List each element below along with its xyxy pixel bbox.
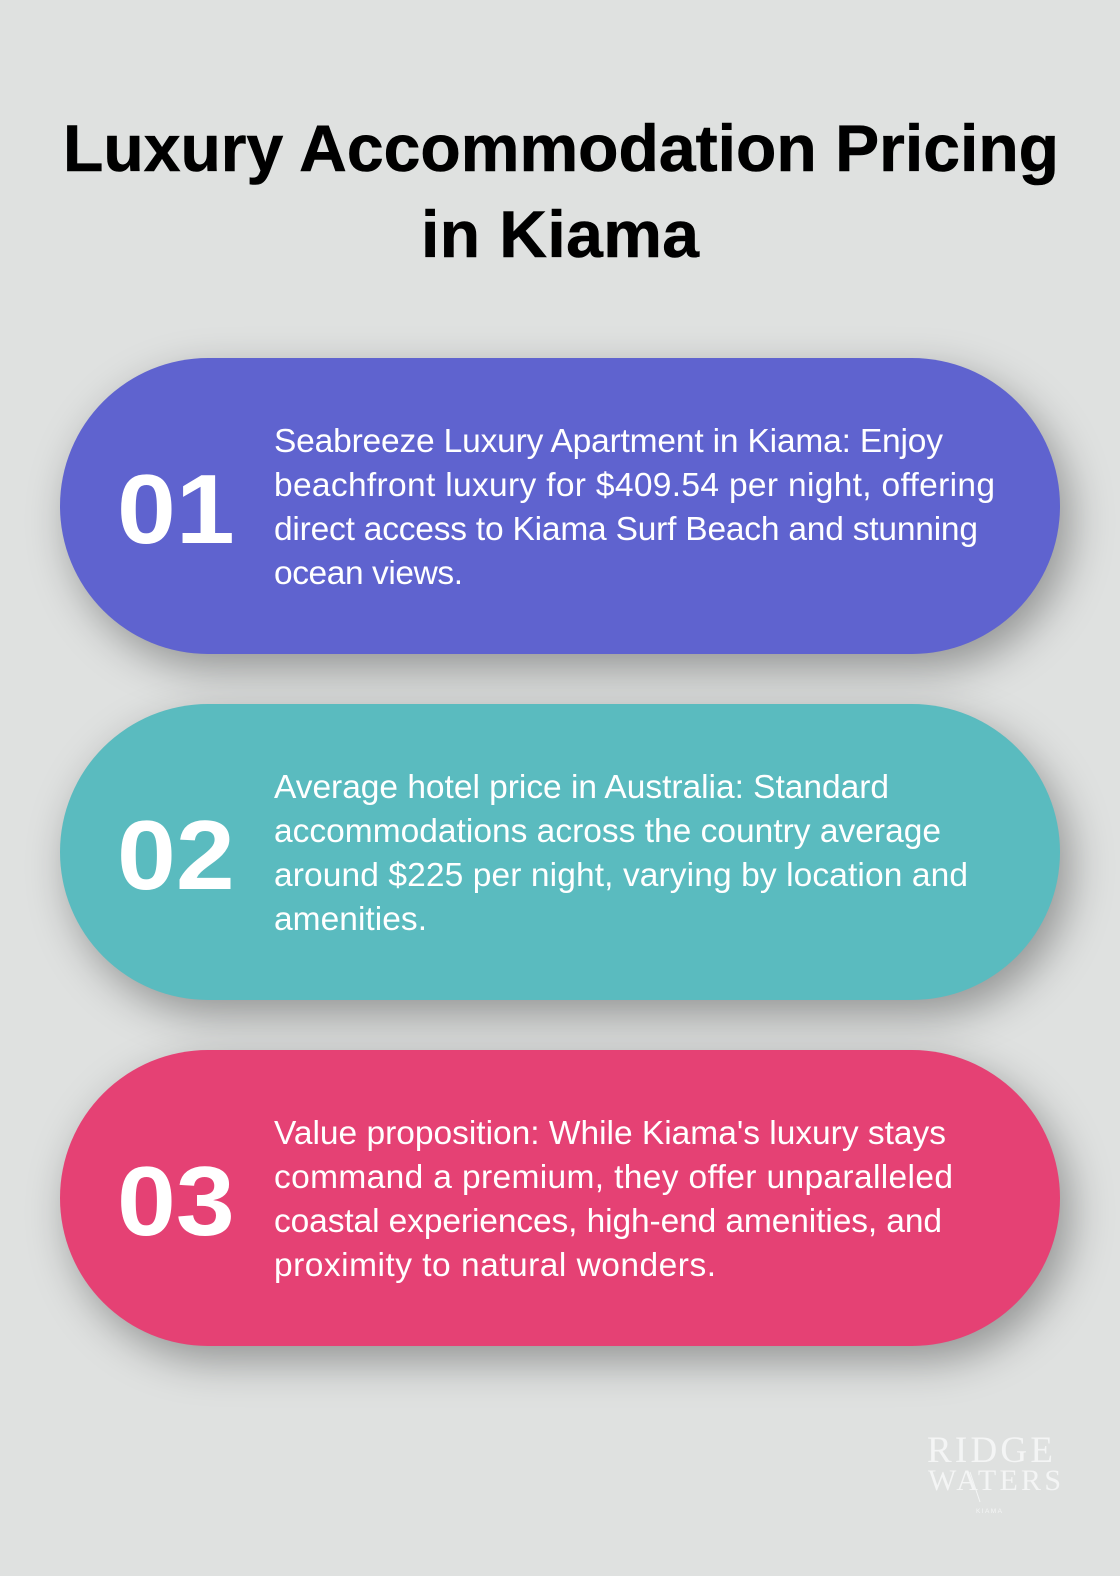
text block: value proposition description: coastal experiences, high-end amenities, and <box>274 1203 942 1240</box>
logo: Ridge Waters Kiama: RIDGE <box>927 1430 1053 1471</box>
step number 02: 02 <box>117 801 235 910</box>
text block: average hotel price description: Average hotel price in Australia: Standard <box>274 769 889 806</box>
panel: Seabreeze luxury apartment <box>60 358 1060 654</box>
panel: average hotel price <box>60 704 1060 1000</box>
text block: value proposition description <box>274 1115 953 1284</box>
logo: Ridge Waters Kiama: WATERS <box>928 1464 1061 1497</box>
step number 03: 03 <box>117 1147 235 1256</box>
text block: average hotel price description: around $225 per night, varying by location and <box>274 857 968 894</box>
panel: value proposition <box>60 1050 1060 1346</box>
text block: average hotel price description: accommodations across the country average <box>274 813 941 850</box>
text block: Seabreeze description: direct access to Kiama Surf Beach and stunning <box>274 511 978 548</box>
text block: Seabreeze description: Seabreeze Luxury Apartment in Kiama: Enjoy <box>274 423 943 460</box>
title: Luxury Accommodation Pricing <box>63 111 1059 185</box>
text block: value proposition description: proximity to natural wonders. <box>274 1247 716 1284</box>
text block: value proposition description: command a premium, they offer unparalleled <box>274 1159 953 1196</box>
text block: average hotel price description: amenities. <box>274 901 427 938</box>
text block: average hotel price description <box>274 769 968 938</box>
text block: value proposition description: Value proposition: While Kiama's luxury stays <box>274 1115 946 1152</box>
logo: Ridge Waters Kiama <box>927 1430 1061 1515</box>
title <box>63 111 1059 271</box>
title: in Kiama <box>421 197 700 271</box>
text block: Seabreeze description: ocean views. <box>274 555 463 592</box>
logo: Ridge Waters Kiama: KIAMA <box>976 1508 1003 1515</box>
text block: Seabreeze description: beachfront luxury for $409.54 per night, offering <box>274 467 995 504</box>
text block: Seabreeze description <box>274 423 995 592</box>
step number 01: 01 <box>117 455 235 564</box>
